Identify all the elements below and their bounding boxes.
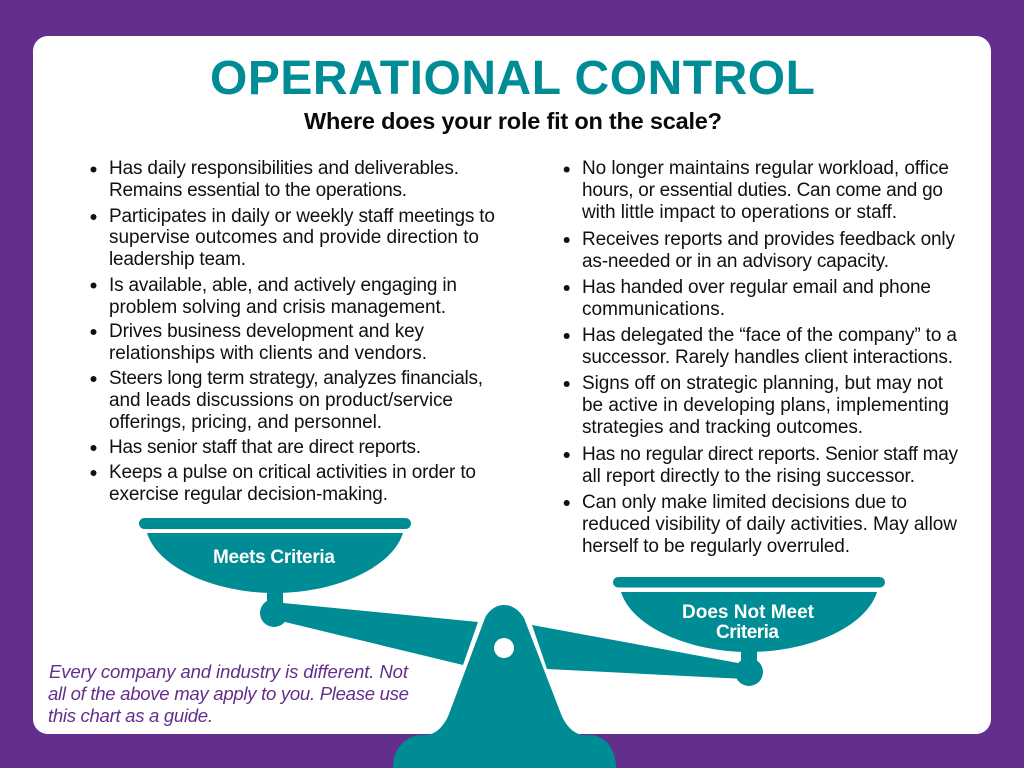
subtitle: Where does your role fit on the scale? — [304, 108, 722, 134]
bullet: limited decisions: reduced visibility of daily activities. May allow — [582, 514, 957, 535]
bullet: face of the company: successor. Rarely handles client interactions. — [582, 347, 953, 368]
panel: right criteria list — [564, 158, 958, 557]
bullet: problem solving: problem solving and crisis management. — [109, 297, 446, 318]
bullet: business development: Drives business development and key — [109, 321, 424, 342]
bullet: staff meetings — [90, 206, 495, 270]
bullet: limited decisions: Can only make limited decisions due to — [582, 492, 907, 513]
bullet: communications: Has handed over regular email and phone — [582, 277, 931, 298]
bullet: communications: communications. — [582, 299, 725, 320]
bullet: advisory reports — [564, 229, 956, 272]
bullet: problem solving — [90, 275, 457, 318]
bullet: strategic planning: strategies and tracking outcomes. — [582, 417, 863, 438]
note: disclaimer — [48, 661, 409, 726]
fulcrum — [393, 605, 616, 768]
right pan: does not meet criteria: Criteria — [716, 622, 779, 643]
bullet: direct reports: Has senior staff that are direct reports. — [109, 437, 421, 458]
note: disclaimer: this chart as a guide. — [48, 705, 213, 726]
bullet: limited decisions: herself to be regularly overruled. — [582, 536, 850, 557]
bullet: staff meetings: Participates in daily or weekly staff meetings to — [109, 206, 495, 227]
title: OPERATIONAL CONTROL — [210, 52, 815, 105]
bullet: limited decisions — [564, 492, 957, 557]
bullet: workload: with little impact to operations or staff. — [581, 202, 897, 223]
bullet: decision-making: exercise regular decision-making. — [109, 484, 388, 505]
bullet: workload — [564, 158, 949, 223]
bullet: face of the company — [564, 325, 957, 368]
bullet: advisory reports: as-needed or in an advisory capacity. — [582, 251, 889, 272]
bullet: decision-making: Keeps a pulse on critical activities in order to — [109, 462, 476, 483]
bullet: problem solving: Is available, able, and actively engaging in — [109, 275, 457, 296]
bullet: strategic planning: be active in developing plans, implementing — [582, 395, 949, 416]
note: disclaimer: Every company and industry is different. Not — [49, 661, 409, 682]
bullet: workload: No longer maintains regular workload, office — [582, 158, 949, 179]
bullet: no direct reports: all report directly to the rising successor. — [582, 466, 915, 487]
bullet: decision-making — [90, 462, 476, 505]
bullet: strategic planning: Signs off on strategic planning, but may not — [582, 373, 944, 394]
left beam — [283, 603, 478, 665]
bullet: no direct reports — [564, 444, 958, 487]
note: disclaimer: all of the above may apply to you. Please use — [48, 683, 409, 704]
bullet: long term strategy — [90, 368, 483, 433]
bullet: long term strategy: Steers long term strategy, analyzes financials, — [109, 368, 483, 389]
right pan: does not meet criteria: Does Not Meet — [682, 602, 815, 623]
bullet: staff meetings: leadership team. — [109, 249, 246, 270]
bullet: face of the company: Has delegated the “face of the company” to a — [582, 325, 957, 346]
bullet: business development — [90, 321, 427, 364]
left pan: meets criteria: Meets Criteria — [213, 547, 335, 568]
left pan: meets criteria — [139, 518, 411, 627]
scale illustration — [139, 518, 885, 768]
bullet: strategic planning — [564, 373, 949, 438]
panel: left criteria list — [90, 158, 495, 505]
bullet: communications — [564, 277, 931, 320]
bullet: daily responsibilities — [90, 158, 459, 201]
bullet: workload: hours, or essential duties. Can come and go — [582, 180, 943, 201]
bullet: long term strategy: and leads discussions on product/service — [109, 390, 453, 411]
right pan: does not meet criteria — [613, 577, 885, 686]
fulcrum pivot hole — [494, 638, 514, 658]
bullet: staff meetings: supervise outcomes and provide direction to — [109, 227, 479, 248]
bullet: daily responsibilities: Remains essential to the operations. — [109, 180, 407, 201]
bullet: daily responsibilities: Has daily responsibilities and deliverables. — [109, 158, 459, 179]
bullet: long term strategy: offerings, pricing, and personnel. — [109, 412, 382, 433]
bullet: business development: relationships with clients and vendors. — [109, 343, 427, 364]
bullet: no direct reports: Has no regular direct reports. Senior staff may — [582, 444, 958, 465]
bullet: advisory reports: Receives reports and provides feedback only — [582, 229, 956, 250]
right beam — [532, 625, 745, 679]
